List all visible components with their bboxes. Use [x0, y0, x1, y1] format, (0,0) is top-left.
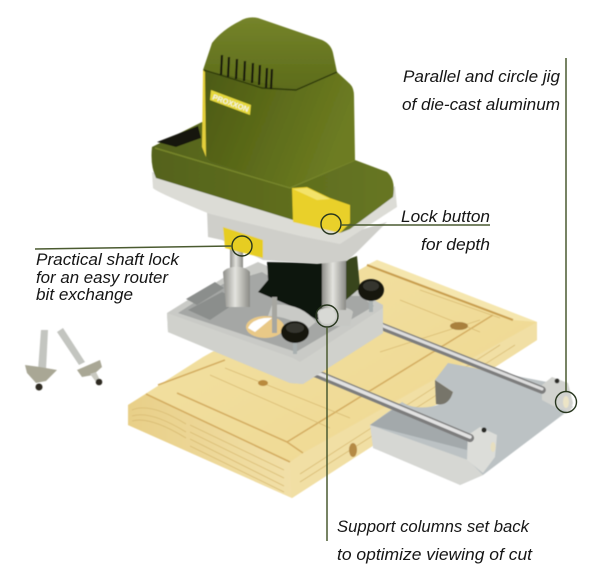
callout: lock button: Lock button [401, 207, 490, 226]
olive base [152, 122, 394, 233]
callout: shaft lock: bit exchange [36, 285, 133, 304]
guide rods [303, 324, 542, 438]
callout: parallel and circle jig [402, 58, 576, 412]
yellow shaft lock [223, 227, 263, 258]
callout: lock button: for depth [421, 235, 490, 254]
callout: lock button [321, 207, 490, 254]
silver neck [207, 210, 387, 264]
left column [223, 248, 250, 307]
router bit [272, 297, 277, 333]
clamp knob front [281, 321, 309, 354]
bit two [57, 328, 102, 385]
callout: parallel and circle jig: Parallel and circle jig [403, 67, 561, 86]
rear jig block [542, 377, 573, 412]
front jig block [467, 427, 497, 473]
callout: shaft lock [35, 236, 252, 304]
PROXXON badge: PROXXON [211, 92, 250, 114]
callout: support columns: to optimize viewing of cut [337, 545, 533, 564]
silver collar [152, 172, 397, 244]
callout: support columns: Support columns set back [337, 517, 530, 536]
callout: parallel and circle jig: of die-cast aluminum [402, 95, 560, 114]
light arc around hole [268, 305, 316, 330]
vent slots [221, 55, 272, 89]
router bits [25, 328, 102, 390]
yellow lock button [292, 187, 350, 233]
clamp knob rear [358, 279, 384, 312]
lower motor body [203, 70, 355, 187]
parallel and circle jig [370, 363, 573, 485]
motor cap [203, 17, 337, 90]
right column [317, 261, 353, 326]
black motor housing [258, 258, 357, 320]
wooden board [128, 260, 537, 498]
bit one [25, 330, 57, 390]
callout: shaft lock: Practical shaft lock [36, 250, 180, 269]
router motor unit [152, 17, 397, 264]
callout: support columns [316, 305, 533, 564]
callout: shaft lock: for an easy router [36, 268, 169, 287]
router base plate [167, 248, 384, 384]
router hole [246, 316, 284, 338]
